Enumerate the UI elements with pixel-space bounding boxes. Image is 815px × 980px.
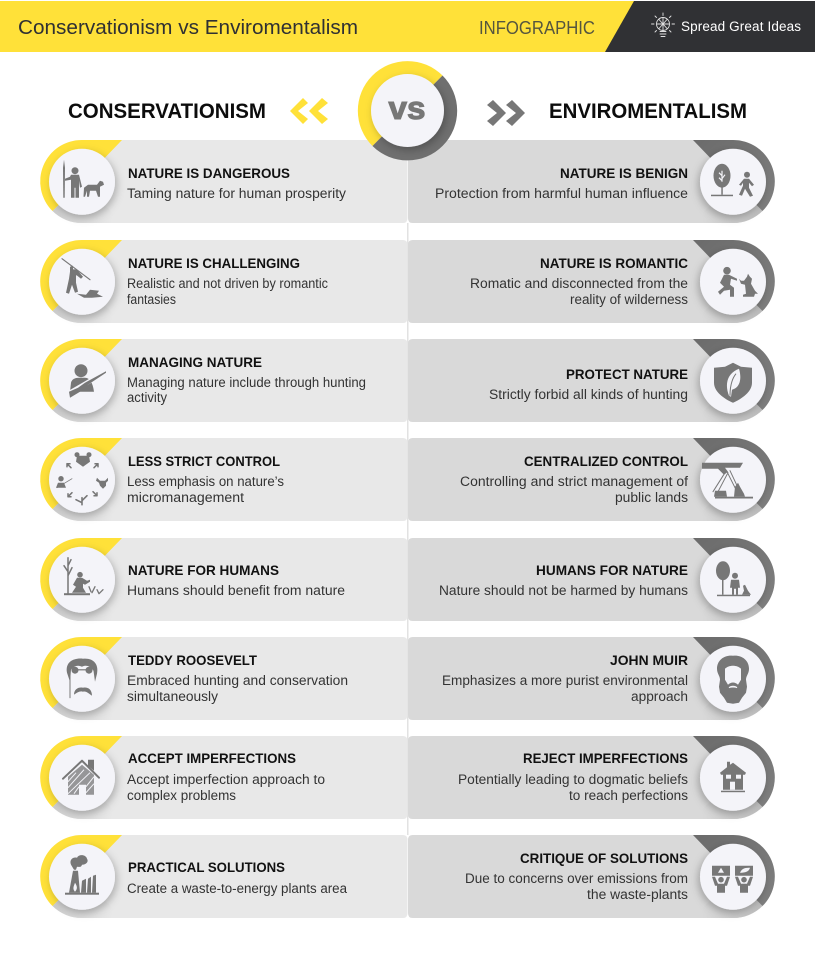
centre divider [407, 223, 408, 835]
icon: person with rifle [68, 364, 106, 398]
row 4 right [408, 438, 775, 521]
row 8 left [40, 835, 407, 918]
vs label: vs [388, 90, 426, 126]
description [127, 474, 284, 505]
panel background [408, 835, 775, 918]
icon: animals in a ring with arrows [56, 452, 108, 505]
description: Realistic and not driven by romantic [127, 276, 328, 291]
row 8 right [408, 835, 775, 918]
heading: CRITIQUE OF SOLUTIONS [520, 850, 688, 866]
icon: tree, person and dog [716, 561, 751, 596]
heading: REJECT IMPERFECTIONS [523, 750, 688, 766]
icon: hunter with dog [63, 160, 104, 198]
description [127, 673, 348, 704]
panel background [40, 835, 407, 918]
panel background [40, 637, 407, 720]
description [127, 276, 328, 307]
arrow: yellow left chevrons [290, 98, 328, 124]
icon: people holding signs [712, 866, 753, 893]
heading: LESS STRICT CONTROL [128, 453, 280, 469]
description [470, 276, 688, 307]
panel background [408, 637, 775, 720]
description [127, 772, 325, 803]
description: Accept imperfection approach to [127, 772, 325, 787]
panel background [408, 538, 775, 621]
description: Humans should benefit from nature [127, 583, 345, 598]
icon: person with dog [718, 267, 758, 297]
description: simultaneously [127, 689, 218, 704]
description: complex problems [127, 788, 236, 803]
vs badge [358, 61, 457, 160]
description: Due to concerns over emissions from [465, 871, 688, 886]
description: Create a waste-to-energy plants area [127, 881, 347, 896]
description: fantasies [127, 292, 176, 307]
icon: tree and walker [711, 164, 754, 197]
description: Taming nature for human prosperity [127, 186, 346, 201]
description: approach [631, 689, 688, 704]
icon: house [720, 762, 746, 792]
brand name: Spread Great Ideas [681, 19, 801, 34]
icon: hand holding animals on strings [702, 463, 753, 498]
row 5 right [408, 538, 775, 621]
description: Protection from harmful human influence [435, 186, 688, 201]
header dark brand block [605, 1, 815, 52]
description: micromanagement [127, 490, 244, 505]
icon: hunter with spear [62, 259, 103, 298]
icon: hatched house [63, 760, 99, 795]
panel background [40, 736, 407, 819]
header title: Conservationism vs Enviromentalism [18, 17, 358, 39]
panel background [40, 140, 407, 223]
column heading: conservationism: CONSERVATIONISM [68, 100, 266, 123]
panel background [408, 240, 775, 323]
description [460, 474, 688, 505]
row 6 right [408, 637, 775, 720]
description: activity [127, 390, 167, 405]
description [442, 673, 688, 704]
row 2 right [408, 240, 775, 323]
icon: John Muir bearded face [717, 656, 749, 704]
row 5 left [40, 538, 407, 621]
panel background [408, 140, 775, 223]
description: Less emphasis on nature’s [127, 474, 284, 489]
description: Managing nature include through hunting [127, 375, 366, 390]
heading: PRACTICAL SOLUTIONS [128, 859, 285, 875]
row 1 right [408, 140, 775, 223]
row 3 right [408, 339, 775, 422]
heading: ACCEPT IMPERFECTIONS [128, 750, 296, 766]
heading: MANAGING NATURE [128, 354, 262, 370]
description: Strictly forbid all kinds of hunting [489, 387, 688, 402]
heading: CENTRALIZED CONTROL [524, 453, 688, 469]
description: the waste-plants [587, 887, 688, 902]
description [127, 375, 366, 405]
description: Emphasizes a more purist environmental [442, 673, 688, 688]
header bar [0, 1, 815, 52]
panel background [40, 438, 407, 521]
row 1 left [40, 140, 407, 223]
heading: JOHN MUIR [610, 652, 688, 668]
description [458, 772, 688, 803]
heading: NATURE IS CHALLENGING [128, 255, 300, 271]
row 3 left [40, 339, 407, 422]
panel background [40, 538, 407, 621]
panel background [40, 339, 407, 422]
panel background [40, 240, 407, 323]
heading: NATURE IS ROMANTIC [540, 255, 688, 271]
row 2 left [40, 240, 407, 323]
heading: NATURE FOR HUMANS [128, 562, 279, 578]
description: Potentially leading to dogmatic beliefs [458, 772, 688, 787]
arrow: grey right chevrons [487, 100, 525, 126]
panel background [408, 438, 775, 521]
description: Romatic and disconnected from the [470, 276, 688, 291]
row 4 left [40, 438, 407, 521]
row 7 left [40, 736, 407, 819]
description: public lands [615, 490, 688, 505]
heading: HUMANS FOR NATURE [536, 562, 688, 578]
icon: Teddy Roosevelt face [67, 659, 97, 698]
description: Controlling and strict management of [460, 474, 688, 489]
icon: person tending plants [64, 558, 103, 595]
infographic label: INFOGRAPHIC [479, 18, 595, 38]
description: to reach perfections [569, 788, 688, 803]
row 6 left [40, 637, 407, 720]
heading: NATURE IS DANGEROUS [128, 165, 290, 181]
description [465, 871, 688, 902]
heading: TEDDY ROOSEVELT [128, 652, 257, 668]
heading: PROTECT NATURE [566, 366, 688, 382]
panel background [408, 736, 775, 819]
heading: NATURE IS BENIGN [560, 165, 688, 181]
description: Embraced hunting and conservation [127, 673, 348, 688]
description: reality of wilderness [570, 292, 688, 307]
icon: leaf shield [714, 363, 752, 403]
icon: waste-to-energy plant [65, 855, 99, 895]
panel background [408, 339, 775, 422]
row 7 right [408, 736, 775, 819]
description: Nature should not be harmed by humans [439, 583, 688, 598]
column heading: enviromentalism: ENVIROMENTALISM [549, 100, 747, 123]
icon: light bulb [652, 13, 674, 36]
